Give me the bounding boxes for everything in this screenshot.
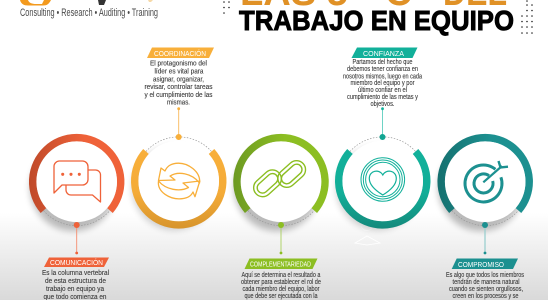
label: COMPROMISO [458, 260, 504, 269]
disc shadow [30, 145, 116, 231]
dashed arc [350, 137, 416, 152]
label: COMUNICACIÓN [50, 258, 103, 267]
decorative dots left of title [223, 1, 230, 14]
text block: revisar, controlar tareas [144, 84, 213, 91]
title line 1 (cropped) [240, 0, 507, 14]
connector [380, 107, 386, 140]
ring [339, 152, 427, 225]
text block [144, 60, 213, 107]
icon: refresh arrows [158, 163, 200, 199]
text block: Partamos del hecho que [352, 59, 413, 66]
text block: tendrán de manera natural [452, 279, 520, 286]
text block: Es algo que todos los miembros [446, 272, 524, 279]
text block: debemos tener confianza en [347, 66, 418, 73]
disc shadow [438, 145, 524, 231]
dashed arc [44, 210, 110, 226]
text block: cumplimiento de las metas y [347, 94, 418, 101]
panel: confianza [336, 48, 427, 245]
panel: comunicación [30, 138, 121, 300]
connector [74, 222, 80, 254]
connector [482, 222, 488, 254]
label [352, 48, 418, 58]
disc shadow [336, 146, 420, 230]
text block: que debe ser ejecutada con la [244, 293, 318, 300]
white disc [36, 141, 117, 222]
panel: compromiso [438, 138, 529, 300]
text block: miembro del equipo y por [350, 80, 415, 87]
dashed arc [248, 210, 314, 226]
text block: Aquí se determina el resultado a [242, 272, 321, 279]
text block: de esta estructura de [45, 278, 106, 285]
icon: chat bubbles [54, 161, 100, 202]
label: COMPLEMENTARIEDAD [250, 262, 311, 268]
icon: heart in circles [361, 158, 405, 201]
text block: creen en los procesos y se [452, 293, 519, 300]
label [452, 258, 518, 269]
text block [343, 59, 422, 108]
white disc [342, 141, 423, 221]
decorative dots right of title [521, 0, 533, 34]
icon: chain link [250, 157, 309, 200]
panel: complementariedad [234, 138, 325, 300]
ring [135, 152, 223, 225]
text block: cuando se sienten orgullosos, [449, 286, 523, 293]
disc shadow [234, 145, 320, 231]
icon: target [465, 161, 508, 202]
text block: El protagonismo del [150, 60, 207, 67]
white disc [445, 141, 526, 222]
title line 2: TRABAJO EN EQUIPO [239, 5, 514, 36]
panel: coordinación [132, 48, 223, 230]
ring [237, 138, 325, 210]
logo tagline: Consulting • Research • Auditing • Training [20, 7, 158, 19]
connector [176, 107, 182, 140]
text block: trabajo en equipo ya [46, 286, 104, 293]
text block: asignar, organizar, [153, 76, 204, 83]
label: CONFIANZA [363, 49, 405, 58]
disc shadow [132, 146, 216, 230]
logo [20, 0, 158, 19]
faint decorative mark [355, 226, 380, 245]
white disc [241, 141, 321, 222]
label: COORDINACIÓN [154, 49, 206, 58]
label [244, 258, 318, 269]
text block: último confiar en el [358, 87, 407, 94]
text block: mismas. [167, 100, 190, 107]
text block [42, 270, 109, 300]
ring [33, 138, 121, 210]
text block: objetivos. [370, 101, 395, 108]
text block: Es la columna vertebral [42, 270, 109, 277]
text block: y el cumplimiento de las [144, 92, 213, 99]
white disc [138, 141, 219, 221]
title [239, 0, 514, 36]
text block: líder es vital para [154, 68, 204, 75]
text block: obtener para establecer el rol de [241, 279, 321, 286]
connector [278, 222, 284, 254]
dashed arc [146, 137, 212, 152]
ring [441, 138, 529, 210]
text block: cada miembro del equipo, labor [242, 286, 320, 293]
dashed arc [452, 210, 518, 226]
text block: nosotros mismos, luego en cada [343, 73, 422, 80]
text block [241, 272, 321, 300]
text block [446, 272, 524, 300]
